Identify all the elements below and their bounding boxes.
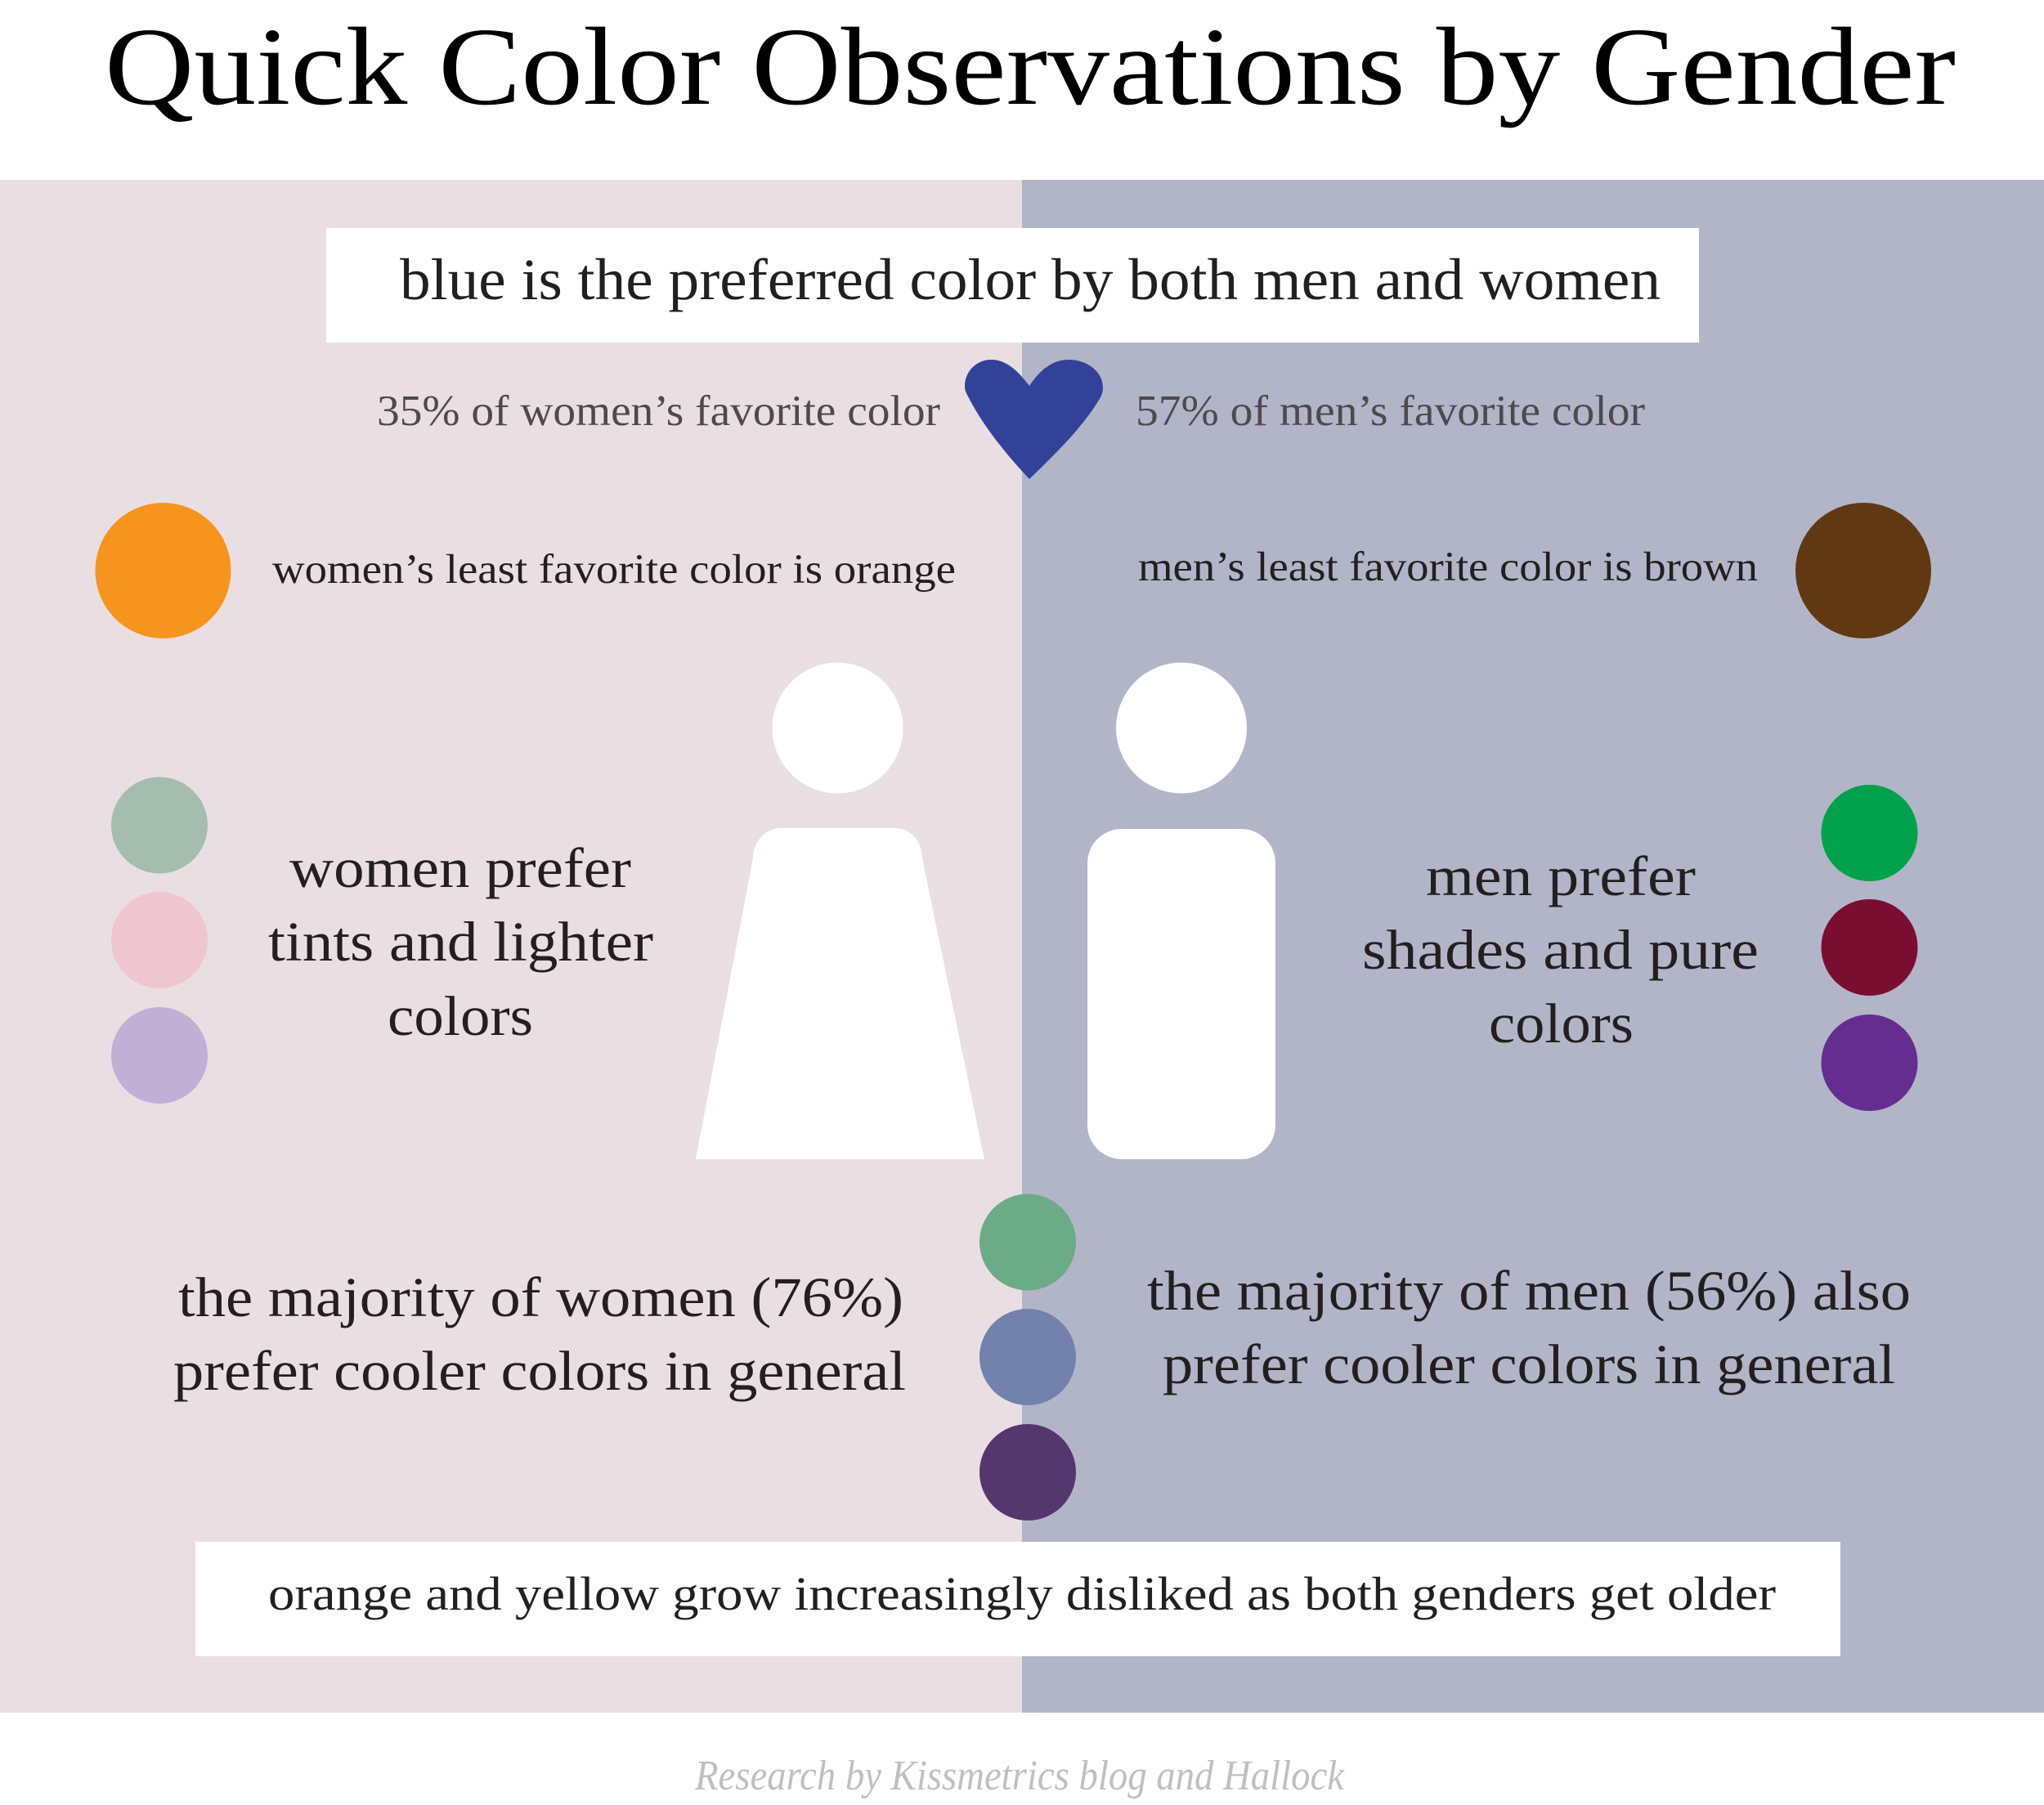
text: men prefer shades: shades and pure <box>1362 919 1759 981</box>
text: men prefer shades <box>1362 845 1759 1055</box>
text: women prefer tints <box>268 837 653 1047</box>
swatches: cool colors <box>979 1194 1076 1521</box>
text: men cooler colors <box>1147 1260 1911 1395</box>
text: women cooler colors: the majority of women (76%) <box>178 1266 903 1328</box>
swatches: women's tints <box>111 777 208 1104</box>
icon: blue heart <box>965 360 1103 479</box>
text: women prefer tints: tints and lighter <box>268 911 653 973</box>
icon: woman figure <box>696 662 984 1159</box>
text: men's favorite: 57% of men’s favorite color <box>1136 387 1645 435</box>
callout: blue preferred <box>326 228 1699 343</box>
panel: men background <box>1022 180 2044 1713</box>
text: women's favorite: 35% of women’s favorite color <box>377 387 940 435</box>
text: women cooler colors: prefer cooler colors in general <box>173 1340 906 1402</box>
text: men prefer shades: colors <box>1489 992 1634 1055</box>
text: women prefer tints: colors <box>388 985 533 1047</box>
panel: women background <box>0 180 1022 1713</box>
callout: orange and yellow <box>195 1542 1840 1656</box>
text: women's least favorite: women’s least favorite color is orange <box>272 547 956 593</box>
text: women cooler colors <box>173 1266 906 1402</box>
text: women prefer tints: women prefer <box>289 837 631 899</box>
text: men's least favorite: men’s least favorite color is brown <box>1138 544 1758 590</box>
icon: brown circle <box>1795 503 1931 638</box>
footer: source: Research by Kissmetrics blog and Hallock <box>694 1753 1345 1799</box>
swatches: men's shades <box>1822 785 1918 1111</box>
callout: orange and yellow: orange and yellow grow increasingly disliked as both genders get older <box>268 1567 1776 1620</box>
callout: blue preferred: blue is the preferred color by both men and women <box>400 247 1661 312</box>
text: men cooler colors: the majority of men (56%) also <box>1147 1260 1911 1322</box>
icon: man figure <box>1087 662 1275 1159</box>
icon: orange circle <box>95 503 231 638</box>
text: men prefer shades: men prefer <box>1426 845 1696 907</box>
title: Quick Color Observations by Gender <box>105 6 1956 128</box>
text: men cooler colors: prefer cooler colors in general <box>1163 1333 1895 1395</box>
